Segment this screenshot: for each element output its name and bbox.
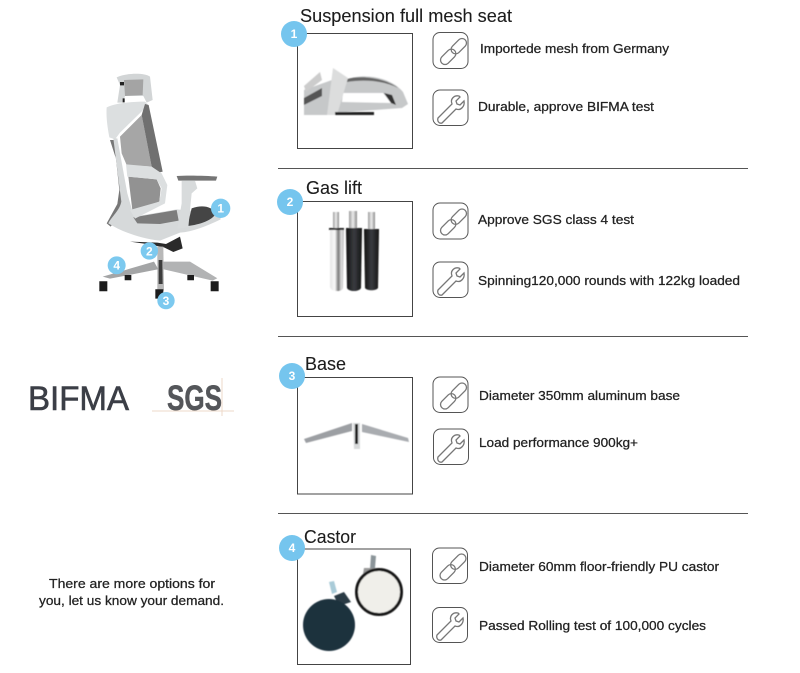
heading: Suspension full mesh seat: [300, 6, 512, 26]
heading: Castor: [304, 527, 356, 547]
icon: wrench: [434, 429, 468, 464]
heading: Gas lift: [306, 178, 362, 198]
icon: wrench: [433, 90, 468, 126]
icon: link: [433, 377, 468, 412]
panel: suspension seat: [281, 6, 670, 148]
badge 4: [279, 535, 305, 561]
image box: seat: [298, 34, 412, 148]
chair illustration: [99, 74, 230, 309]
feature text: Passed Rolling test of 100,000 cycles: [479, 619, 706, 633]
feature text: Importede mesh from Germany: [480, 42, 670, 56]
panel: gas lift: [277, 178, 740, 316]
feature text: Durable, approve BIFMA test: [478, 100, 655, 114]
image box: aluminum base: [298, 378, 412, 494]
marker 4: 4: [113, 259, 120, 273]
panel: base: [279, 354, 680, 494]
marker 4: [108, 256, 126, 274]
badge 2: 2: [287, 195, 294, 209]
badge 1: 1: [291, 27, 298, 41]
marker 1: 1: [217, 202, 224, 216]
badge 3: 3: [289, 369, 296, 383]
icon: link: [433, 203, 468, 239]
badge 2: [277, 189, 303, 215]
badge 4: 4: [289, 541, 296, 555]
marker 2: 2: [146, 244, 153, 258]
panel: castor: [279, 527, 719, 664]
marker 3: 3: [163, 294, 170, 308]
image box: castors: [298, 549, 410, 664]
note text: [39, 577, 224, 608]
marker 3: [157, 292, 175, 309]
image box: gas lifts: [298, 202, 412, 316]
heading: Base: [305, 354, 346, 374]
feature text: Load performance 900kg+: [479, 436, 638, 450]
icon: link: [433, 32, 468, 68]
logo: SGS: SGS: [167, 379, 222, 418]
icon: link: [432, 548, 468, 584]
feature text: Diameter 350mm aluminum base: [479, 389, 680, 403]
feature text: Diameter 60mm floor-friendly PU castor: [479, 560, 719, 574]
marker 2: [141, 242, 158, 260]
marker 1: [211, 199, 230, 218]
badge 1: [281, 21, 307, 47]
icon: wrench: [433, 262, 468, 298]
logo: BIFMA: BIFMA: [28, 380, 129, 418]
feature text: Approve SGS class 4 test: [478, 213, 635, 227]
note text: There are more options for: [49, 577, 215, 591]
badge 3: [279, 363, 305, 389]
note text: you, let us know your demand.: [39, 594, 224, 608]
icon: wrench: [432, 608, 468, 642]
feature text: Spinning120,000 rounds with 122kg loaded: [478, 274, 740, 288]
